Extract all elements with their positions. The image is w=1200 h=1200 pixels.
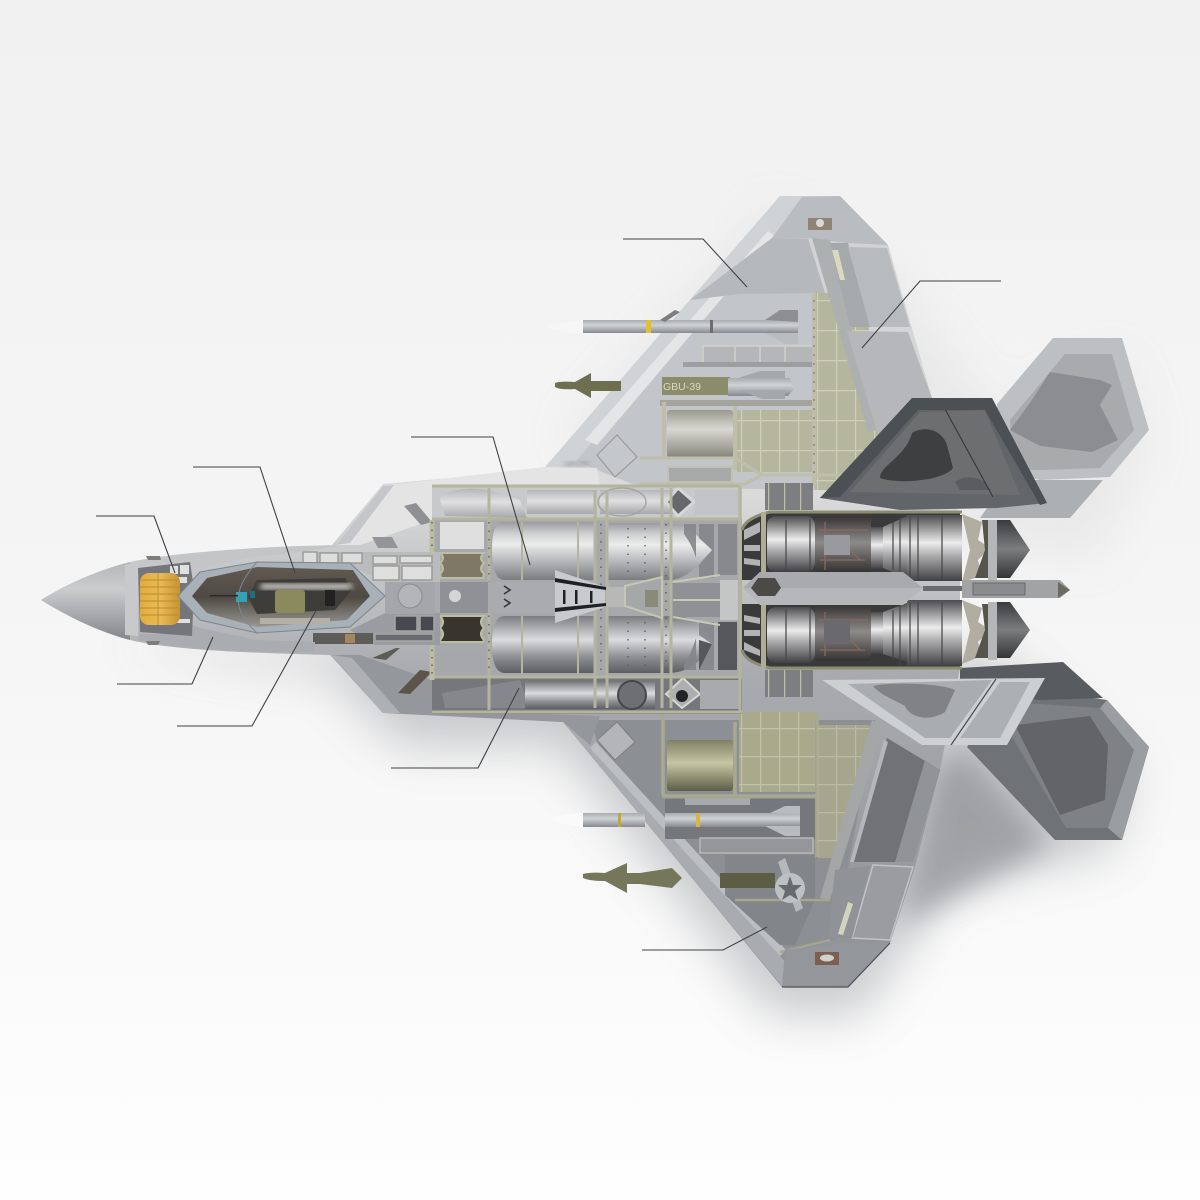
LERX panels (332, 467, 600, 745)
callout line: wing upper (623, 239, 747, 287)
roundel insignia (775, 858, 805, 912)
access diamond lower (597, 722, 635, 760)
fuel tank upper rear (608, 523, 713, 580)
tank lower wing (667, 740, 733, 791)
flap upper one (848, 247, 910, 327)
engine lower (767, 600, 1030, 666)
engine upper (767, 514, 1030, 582)
mid fuselage (432, 486, 742, 714)
callout line: flap (862, 281, 1001, 348)
central spine (385, 570, 662, 623)
wing tip panel upper (772, 196, 888, 245)
lower vent B (398, 670, 432, 694)
callout line: radar (96, 516, 175, 573)
canopy glass (192, 567, 370, 627)
wing upper (545, 196, 932, 510)
tail boom (743, 572, 1070, 605)
tank upper wing (667, 410, 733, 458)
rear fin upper (980, 338, 1149, 518)
bomb upper (555, 371, 793, 399)
wing upper base (575, 237, 825, 490)
engine bays (742, 512, 1030, 668)
wing bay racks (703, 346, 815, 364)
display screen (236, 592, 247, 602)
frames upper wing (640, 458, 870, 484)
upper vent B (372, 537, 398, 548)
boom hexagon (743, 572, 923, 605)
stabilator lower light (822, 678, 1045, 745)
sphere fairing (398, 584, 422, 608)
flap upper two (847, 331, 932, 435)
flap lower one (852, 738, 940, 862)
callout line: fuel tank (411, 437, 530, 565)
wing lower base (590, 720, 875, 952)
chevron marks (504, 586, 510, 607)
canopy frame (178, 562, 385, 633)
forward bays (303, 552, 440, 582)
rear duct trapezoid (625, 577, 662, 618)
flap lower two (852, 865, 913, 940)
intake duct lower (432, 678, 742, 714)
rear bay cells (684, 524, 737, 670)
callout line: cockpit (193, 467, 295, 573)
forward hatch lower (440, 616, 484, 642)
access diamond upper (597, 435, 637, 477)
nozzle (962, 600, 990, 664)
lower vent A (372, 648, 400, 660)
stabilator upper dark (820, 398, 1047, 510)
nozzle (962, 514, 990, 582)
grid lower inner (818, 725, 870, 858)
ground shadow (110, 645, 1130, 1015)
striped cells lower (765, 670, 813, 697)
fuselage upper skin (138, 546, 340, 580)
callout line: intake (391, 688, 519, 768)
grid lower wing (739, 712, 815, 792)
fuel tank upper front (492, 522, 595, 580)
bomb lower (583, 863, 775, 893)
missile lower (547, 806, 800, 836)
upper soft shadow (560, 205, 1150, 560)
fuel tank lower rear (608, 616, 714, 673)
grid upper wing (737, 410, 813, 472)
frames lower wing (662, 712, 817, 857)
airframe silhouette (41, 196, 960, 987)
striped cells upper (765, 483, 813, 510)
intake duct upper (432, 486, 742, 519)
canopy (178, 562, 385, 633)
dorsal brake panel (555, 570, 605, 623)
lower LERX surface (332, 655, 600, 745)
callout line: wing lower (642, 927, 767, 950)
fuselage lower skin (138, 620, 315, 652)
rear fin lower (960, 662, 1149, 840)
nose gear details (146, 556, 161, 645)
aircraft (41, 196, 1149, 987)
nose cone (41, 562, 130, 640)
side bay below canopy (313, 633, 373, 644)
bomb label: GBU-39 (663, 381, 701, 393)
radar antenna (140, 573, 180, 625)
wing lower (563, 670, 940, 987)
forward hatch upper (440, 553, 484, 578)
radar bay (138, 562, 193, 636)
upper LERX surface (336, 467, 600, 545)
missile upper (547, 310, 798, 344)
ejection seat (275, 590, 305, 613)
callout line: seat (177, 607, 318, 726)
inlet vanes (744, 522, 760, 656)
wing leading edge strip lower (563, 722, 807, 986)
forward bay upper bright (440, 522, 484, 549)
wing leading edge strip upper (545, 196, 802, 468)
upper vent A (404, 503, 432, 525)
missile bay lower (665, 799, 815, 839)
callout line: fuselage skin (117, 637, 213, 684)
wing tip lower (782, 942, 890, 987)
forward fuselage (41, 546, 440, 652)
tail shadow (900, 750, 1050, 925)
fuel tank lower front (492, 616, 595, 673)
rectangle upper wing (668, 467, 732, 482)
frame lattice (432, 486, 742, 712)
wing grid upper (815, 293, 880, 490)
